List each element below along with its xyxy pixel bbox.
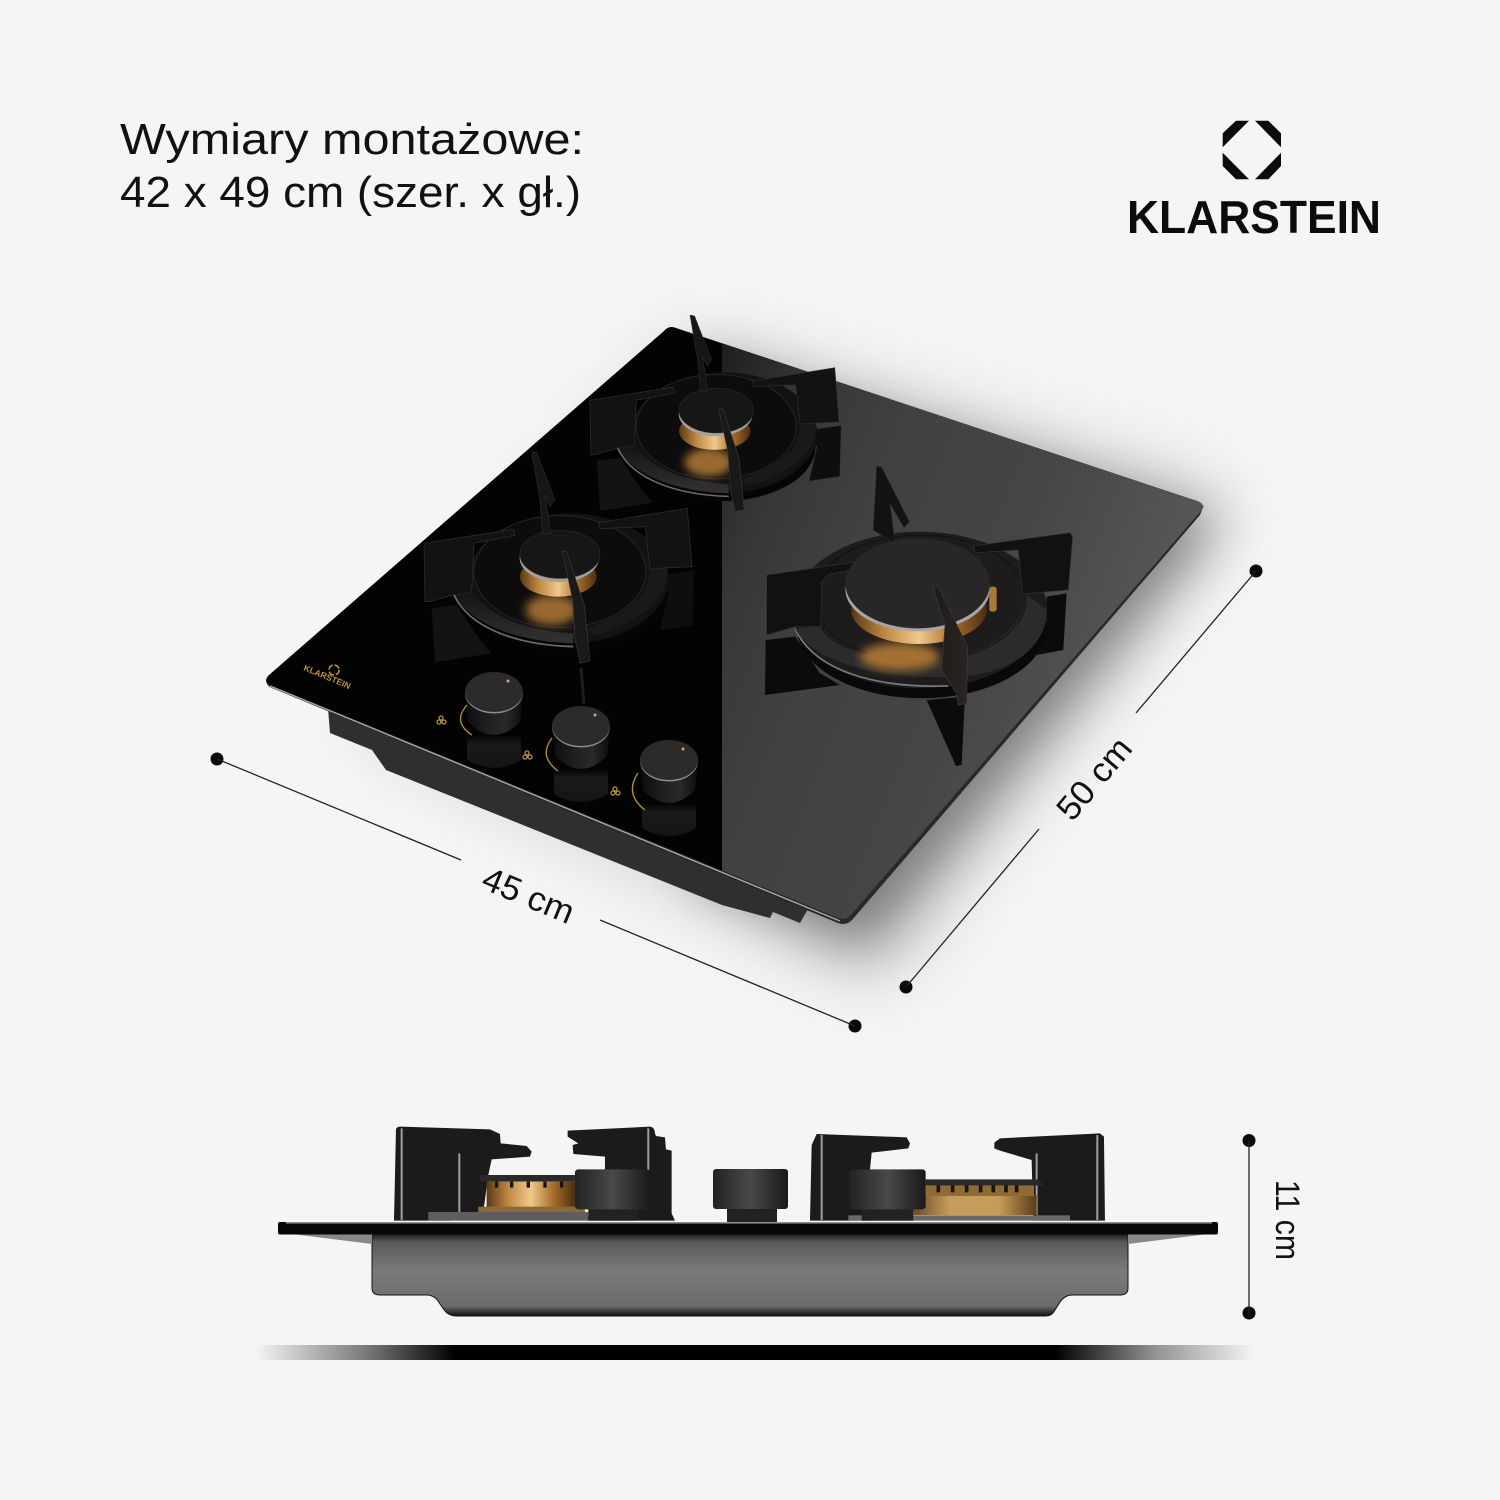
glass edge: [266, 505, 1204, 924]
hob shadow: [360, 340, 1235, 985]
glass top: [266, 327, 1203, 919]
underside wedges: [292, 1234, 1208, 1244]
logo: Klarstein: [1127, 121, 1381, 243]
front edge highlight: [270, 686, 840, 921]
knob markings: [437, 705, 645, 810]
title: [120, 115, 584, 217]
printed logo on glass: KLARSTEIN: [302, 663, 352, 691]
knob 3: [640, 740, 698, 836]
tray: [372, 1234, 1128, 1316]
ground shadow: [255, 1345, 1255, 1360]
dimension: depth 50 cm: 50 cm: [1049, 730, 1140, 828]
burner: left: [424, 452, 694, 663]
dimension: width 45 cm: [210, 752, 862, 1032]
title: Wymiary montażowe:: [120, 115, 584, 164]
hob perspective view: [266, 315, 1204, 924]
hob side view: [278, 1127, 1218, 1316]
knob middle: [713, 1169, 788, 1222]
hob tray: [328, 708, 850, 923]
burner: right large: [765, 466, 1073, 766]
burner right side: [810, 1133, 1105, 1221]
dimension: height 11 cm: [1242, 1134, 1306, 1320]
dimension: depth 50 cm: [900, 564, 1262, 994]
dimension: width 45 cm: 45 cm: [477, 860, 580, 932]
dimension: height 11 cm: 11 cm: [1268, 1180, 1306, 1260]
knob 2: [552, 706, 610, 802]
glass reflection line: [581, 668, 584, 704]
title: 42 x 49 cm (szer. x gł.): [120, 168, 581, 217]
logo: Klarstein: KLARSTEIN: [1127, 191, 1381, 243]
glass: [278, 1222, 1218, 1234]
knob 1: [465, 672, 523, 768]
burner: rear: [590, 315, 841, 512]
burner left side: [394, 1127, 675, 1221]
